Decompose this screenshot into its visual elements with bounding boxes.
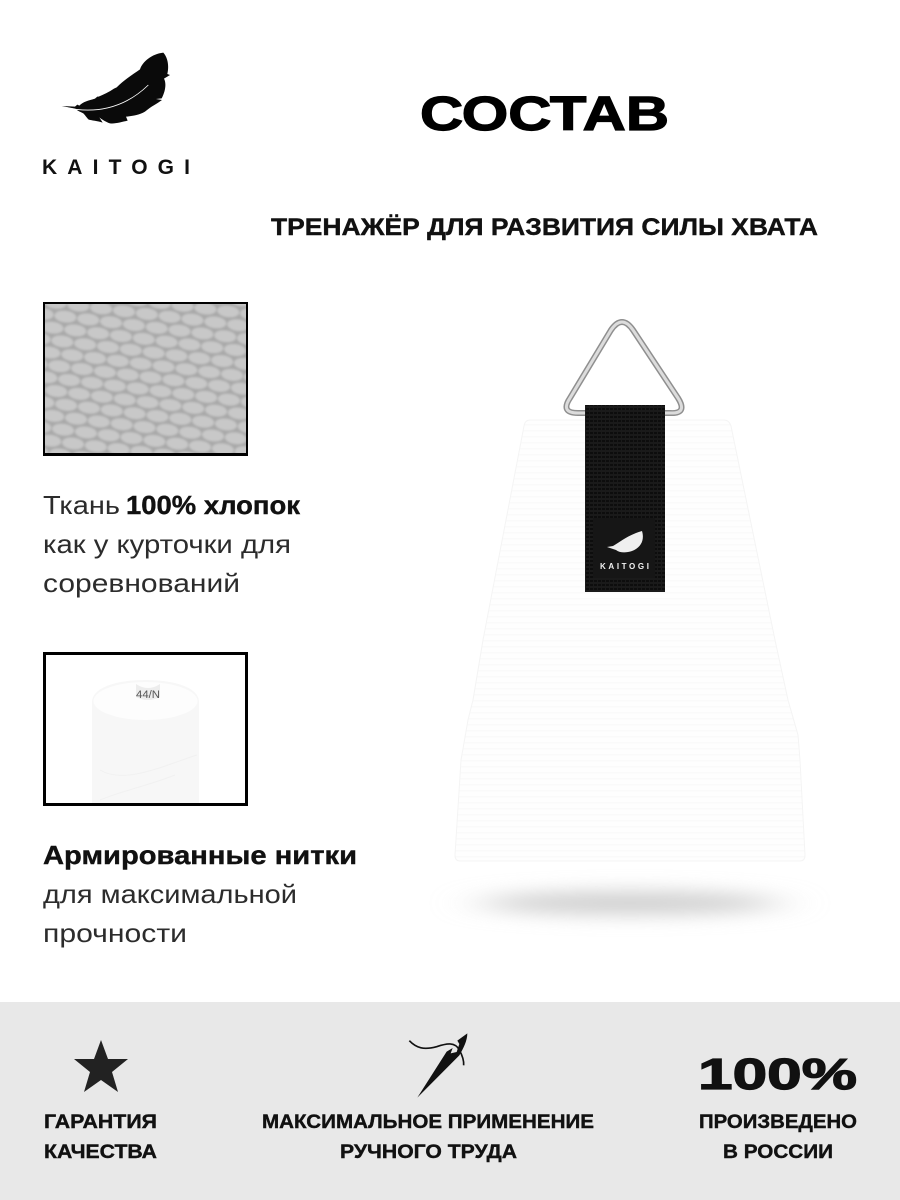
- label: quality guarantee: ГАРАНТИЯ: [44, 1112, 157, 1133]
- icon: star: [74, 1040, 128, 1092]
- panel: thread spool photo: [44, 654, 246, 810]
- text block: fabric description: [43, 490, 301, 598]
- label: handmade: [262, 1112, 594, 1163]
- feature: quality guarantee: [44, 1040, 157, 1163]
- logo: KAITOGI feather and wordmark: [42, 53, 190, 179]
- subtitle: ТРЕНАЖЁР ДЛЯ РАЗВИТИЯ СИЛЫ ХВАТА: [271, 214, 818, 241]
- brand wordmark: KAITOGI: [42, 156, 190, 179]
- icon: white feather: [607, 531, 643, 552]
- text block: thread description: Армированные нитки: [43, 840, 357, 870]
- big number: 100%: 100%: [698, 1050, 857, 1099]
- white fabric body: [455, 420, 805, 861]
- text block: thread description: [43, 840, 357, 948]
- icon: feather: [62, 53, 170, 123]
- text block: fabric description: как у курточки для: [43, 529, 291, 559]
- text block: thread description: для максимальной: [43, 879, 297, 909]
- label: made in Russia: [699, 1112, 857, 1163]
- text block: fabric description: соревнований: [43, 568, 240, 598]
- label wordmark: KAITOGI: [600, 562, 649, 571]
- label: handmade: МАКСИМАЛЬНОЕ ПРИМЕНЕНИЕ: [262, 1112, 594, 1133]
- label: handmade: РУЧНОГО ТРУДА: [340, 1142, 517, 1163]
- text block: fabric description: 100% хлопок: [126, 490, 301, 520]
- feature: handmade: [262, 1033, 594, 1163]
- shadow under product: [480, 891, 780, 915]
- text block: thread description: прочности: [43, 918, 187, 948]
- metal triangle ring: [566, 322, 682, 413]
- black strap: [585, 405, 665, 592]
- label: quality guarantee: КАЧЕСТВА: [44, 1142, 157, 1163]
- text block: fabric description: Ткань: [43, 490, 120, 520]
- icon: needle and thread: [409, 1033, 467, 1098]
- panel: bottom features band: [0, 1002, 900, 1200]
- title: СОСТАВ: [420, 88, 669, 141]
- product photo: grip trainer: [455, 322, 805, 915]
- feature: made in Russia: [698, 1050, 857, 1163]
- label: made in Russia: В РОССИИ: [723, 1142, 833, 1163]
- panel: thread spool photo: 44/N: [136, 689, 160, 701]
- label: made in Russia: ПРОИЗВЕДЕНО: [699, 1112, 857, 1133]
- label: quality guarantee: [44, 1112, 157, 1163]
- sewn brand label: [593, 518, 655, 578]
- panel: fabric swatch photo: [43, 302, 248, 456]
